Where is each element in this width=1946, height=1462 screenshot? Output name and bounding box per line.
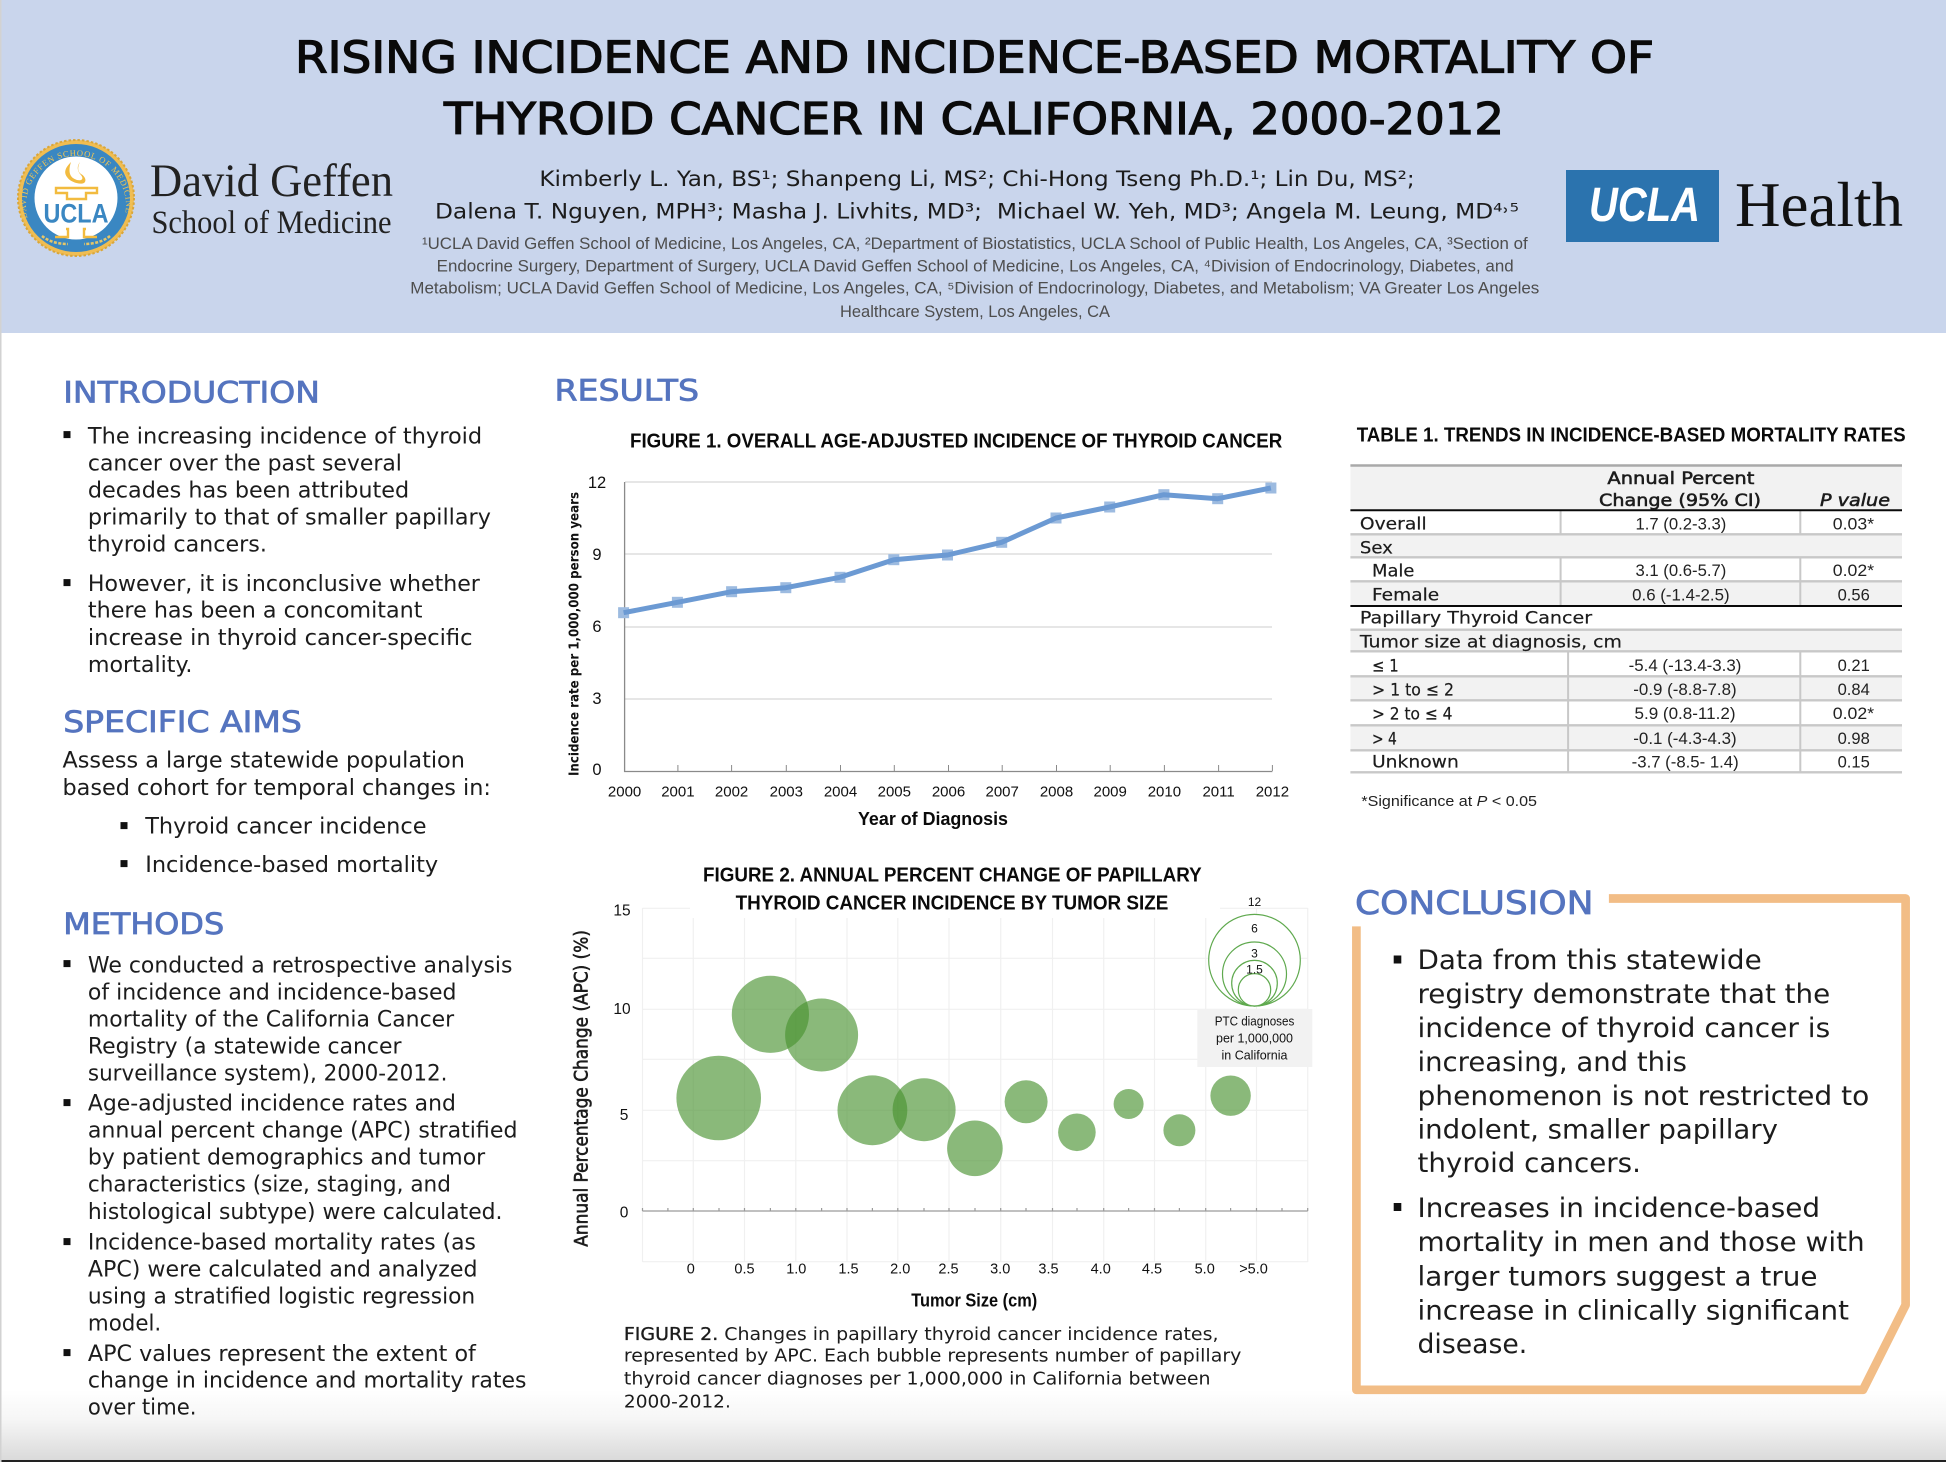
methods bullets: APC) were calculated and analyzed <box>88 1258 477 1283</box>
panel: specific aims <box>62 705 491 878</box>
figure 1 data markers <box>618 482 1276 618</box>
affiliations: Healthcare System, Los Angeles, CA <box>840 303 1110 321</box>
affiliations: ¹UCLA David Geffen School of Medicine, Los Angeles, CA, ²Department of Biostatistics, UCLA School of Public Health, Los Angeles, CA, ³Section of <box>422 235 1528 253</box>
figure 2 size legend: in California <box>1222 1047 1288 1062</box>
table row labels: Tumor size at diagnosis, cm <box>1359 632 1622 652</box>
figure 1 title: FIGURE 1. OVERALL AGE-ADJUSTED INCIDENCE OF THYROID CANCER <box>630 430 1283 452</box>
figure 1 y axis labels: 3 <box>592 690 602 708</box>
introduction bullets: increase in thyroid cancer-specific <box>88 626 472 651</box>
methods bullets: model. <box>88 1312 161 1337</box>
figure 2 size legend: per 1,000,000 <box>1216 1031 1293 1046</box>
table row labels: > 4 <box>1372 729 1397 749</box>
table row labels: > 2 to ≤ 4 <box>1372 704 1452 724</box>
table values: p value: 0.02* <box>1833 705 1875 723</box>
figure 2 y axis labels: 0 <box>620 1205 629 1222</box>
table values: p value: 0.56 <box>1838 586 1870 604</box>
figure 2 x axis labels: 0.5 <box>734 1262 755 1278</box>
panel: introduction <box>63 376 491 678</box>
figure 1 y axis labels <box>588 474 606 779</box>
table row labels: Female <box>1372 586 1439 606</box>
figure 1 x axis labels: 2002 <box>715 784 748 801</box>
heading: specific aims: SPECIFIC AIMS <box>63 705 302 739</box>
methods bullets: using a stratified logistic regression <box>88 1285 475 1310</box>
heading: introduction: INTRODUCTION <box>63 376 320 410</box>
logo: David Geffen School of Medicine wordmark <box>150 155 393 241</box>
introduction bullets: there has been a concomitant <box>88 599 423 624</box>
figure 2 size legend <box>1197 895 1312 1067</box>
figure 2 x axis title: Tumor Size (cm) <box>911 1290 1037 1310</box>
table header: Change (95% CI) <box>1599 491 1761 511</box>
conclusion bullets: Data from this statewide <box>1418 945 1762 976</box>
methods bullets: Registry (a statewide cancer <box>88 1035 402 1060</box>
figure 1 x axis labels: 2003 <box>770 784 803 801</box>
title: THYROID CANCER IN CALIFORNIA, 2000-2012 <box>443 95 1504 145</box>
figure 2 x axis labels <box>687 1262 1268 1278</box>
title <box>295 34 1654 145</box>
figure 2 caption <box>624 1324 1242 1412</box>
figure 1 x axis labels: 2008 <box>1040 784 1073 801</box>
figure 1 x axis labels: 2011 <box>1202 784 1235 801</box>
methods bullets: Incidence-based mortality rates (as <box>88 1230 476 1255</box>
table values: annual percent change: 5.9 (0.8-11.2) <box>1634 705 1736 723</box>
introduction bullets: mortality. <box>88 653 192 678</box>
methods bullets: We conducted a retrospective analysis <box>88 954 512 979</box>
table row shading <box>1350 466 1902 750</box>
figure 2 y axis labels: 15 <box>613 903 631 920</box>
authors: Dalena T. Nguyen, MPH³; Masha J. Livhits, MD³; Michael W. Yeh, MD³; Angela M. Leung, MD⁴˒⁵ <box>435 199 1519 223</box>
heading: results: RESULTS <box>554 374 699 408</box>
table header: P value <box>1820 491 1890 511</box>
methods bullets: over time. <box>88 1396 196 1421</box>
introduction bullets <box>64 425 491 678</box>
figure 2 title <box>703 865 1202 914</box>
table row labels: Male <box>1372 562 1414 582</box>
aims text: Assess a large statewide population <box>62 749 465 774</box>
figure 1 x axis labels: 2001 <box>661 784 695 801</box>
conclusion bullets: Increases in incidence-based <box>1418 1193 1820 1224</box>
figure 2 x axis labels: 1.5 <box>838 1262 859 1278</box>
figure 2 x axis labels: 2.0 <box>890 1262 910 1278</box>
introduction bullets: primarily to that of smaller papillary <box>88 506 491 531</box>
figure 1 x axis labels: 2005 <box>878 784 911 801</box>
table row labels <box>1359 514 1622 772</box>
methods bullets <box>64 954 527 1421</box>
figure 2 caption: FIGURE 2. Changes in papillary thyroid cancer incidence rates, <box>624 1324 1218 1345</box>
table values: annual percent change: 0.6 (-1.4-2.5) <box>1632 586 1730 604</box>
figure 2 caption: thyroid cancer diagnoses per 1,000,000 in California between <box>624 1369 1211 1390</box>
figure 1 y axis labels: 0 <box>592 761 602 779</box>
introduction bullets: cancer over the past several <box>88 451 402 476</box>
table title: TABLE 1. TRENDS IN INCIDENCE-BASED MORTALITY RATES <box>1357 425 1906 447</box>
figure 2 caption: 2000-2012. <box>624 1391 731 1412</box>
methods bullets: of incidence and incidence-based <box>88 980 456 1005</box>
figure 2 x axis labels: 0 <box>687 1262 695 1278</box>
figure 2 title backing <box>690 860 1220 918</box>
heading: conclusion: CONCLUSION <box>1355 884 1594 922</box>
header banner <box>2 0 1946 333</box>
table values: p value: 0.98 <box>1838 730 1870 748</box>
methods bullets: Age-adjusted incidence rates and <box>88 1092 456 1117</box>
logo: UCLA Health: UCLA <box>1589 179 1700 232</box>
methods bullets: mortality of the California Cancer <box>88 1008 455 1033</box>
figure 1 y axis labels: 9 <box>592 546 602 564</box>
table row labels: Unknown <box>1372 752 1459 772</box>
table values: p value: 0.84 <box>1838 681 1870 699</box>
figure 2 x axis labels: 1.0 <box>786 1262 806 1278</box>
conclusion bullets: indolent, smaller papillary <box>1418 1114 1778 1145</box>
introduction bullets: thyroid cancers. <box>88 533 267 558</box>
affiliations: Metabolism; UCLA David Geffen School of Medicine, Los Angeles, CA, ⁵Division of Endocrinology, Diabetes, and Metabolism; VA Greater Los Angeles <box>410 279 1539 297</box>
figure 1 x axis labels: 2000 <box>608 784 641 801</box>
figure 2 size legend: 3 <box>1251 946 1258 960</box>
table values: annual percent change: 3.1 (0.6-5.7) <box>1636 562 1726 580</box>
table values: p value: 0.15 <box>1838 754 1870 772</box>
table row labels: Sex <box>1360 539 1393 559</box>
figure 2 size legend: PTC diagnoses <box>1215 1014 1295 1029</box>
figure 1 y axis title: Incidence rate per 1,000,000 person years <box>566 492 582 776</box>
table footnote: *Significance at P < 0.05 <box>1361 793 1537 810</box>
logo: David Geffen School of Medicine wordmark: David Geffen <box>150 155 393 207</box>
figure 1 x axis labels: 2007 <box>986 784 1019 801</box>
figure 1 axes <box>625 482 1272 772</box>
aims text <box>62 749 491 878</box>
table values: annual percent change: 1.7 (0.2-3.3) <box>1636 516 1726 534</box>
figure 2 gridlines <box>642 908 1308 1262</box>
introduction bullets: The increasing incidence of thyroid <box>87 425 482 450</box>
figure 2 size legend: 1.5 <box>1246 962 1263 976</box>
table values: annual percent change: -5.4 (-13.4-3.3) <box>1629 657 1741 675</box>
figure 1 x axis labels: 2012 <box>1256 784 1289 801</box>
conclusion bullets: registry demonstrate that the <box>1418 979 1830 1010</box>
figure 2 caption: represented by APC. Each bubble represents number of papillary <box>624 1346 1242 1367</box>
title: RISING INCIDENCE AND INCIDENCE-BASED MORTALITY OF <box>295 34 1654 84</box>
logo: David Geffen School of Medicine wordmark: School of Medicine <box>152 205 392 241</box>
figure 2 x axis labels: 4.5 <box>1142 1262 1162 1278</box>
figure 1: line chart <box>566 430 1289 829</box>
figure 2 size legend: 12 <box>1248 895 1261 909</box>
affiliations <box>410 235 1539 321</box>
conclusion bullets: mortality in men and those with <box>1418 1227 1865 1258</box>
introduction bullets: decades has been attributed <box>88 478 409 503</box>
figure 2 x axis labels: 3.0 <box>990 1262 1010 1278</box>
figure 2 x axis labels: 4.0 <box>1091 1262 1111 1278</box>
authors: Kimberly L. Yan, BS¹; Shanpeng Li, MS²; Chi-Hong Tseng Ph.D.¹; Lin Du, MS²; <box>539 167 1415 191</box>
aims text: Thyroid cancer incidence <box>144 815 427 840</box>
table values: annual percent change: -0.1 (-4.3-4.3) <box>1633 730 1737 748</box>
figure 1 x axis labels: 2004 <box>824 784 857 801</box>
table values: p value <box>1833 516 1875 772</box>
figure 1 x axis title: Year of Diagnosis <box>858 808 1008 829</box>
conclusion bullets: incidence of thyroid cancer is <box>1418 1013 1830 1044</box>
table rules <box>1350 466 1902 772</box>
figure 2 y axis labels: 10 <box>613 1001 631 1018</box>
figure 2: bubble chart <box>572 860 1312 1310</box>
table values: p value: 0.21 <box>1838 657 1870 675</box>
figure 2 title: THYROID CANCER INCIDENCE BY TUMOR SIZE <box>736 892 1168 914</box>
table values: p value: 0.03* <box>1833 516 1875 534</box>
conclusion bullets: increasing, and this <box>1418 1047 1687 1078</box>
methods bullets: characteristics (size, staging, and <box>88 1173 451 1198</box>
figure 2 size legend: 6 <box>1251 921 1258 935</box>
table 1 <box>1350 425 1906 810</box>
heading: methods: METHODS <box>63 907 224 941</box>
table row labels: > 1 to ≤ 2 <box>1372 680 1454 700</box>
conclusion frame <box>1356 898 1906 1390</box>
figure 2 bubbles <box>676 976 1251 1176</box>
logo: David Geffen School of Medicine seal <box>17 139 135 257</box>
methods bullets: APC values represent the extent of <box>88 1342 477 1367</box>
logo: David Geffen School of Medicine seal: UCLA <box>44 198 108 228</box>
table values: annual percent change <box>1629 516 1741 772</box>
figure 2 y axis title: Annual Percentage Change (APC) (%) <box>572 930 592 1247</box>
methods bullets: histological subtype) were calculated. <box>88 1200 502 1225</box>
figure 1 x axis labels: 2006 <box>932 784 965 801</box>
affiliations: Endocrine Surgery, Department of Surgery, UCLA David Geffen School of Medicine, Los Angeles, CA, ⁴Division of Endocrinology, Diabetes, and <box>437 257 1514 275</box>
figure 1 x axis labels: 2010 <box>1148 784 1181 801</box>
conclusion bullets: disease. <box>1418 1329 1527 1360</box>
authors <box>435 167 1519 223</box>
table values: annual percent change: -3.7 (-8.5- 1.4) <box>1632 754 1739 772</box>
figure 1 data line <box>624 488 1271 613</box>
panel: methods <box>63 907 526 1421</box>
figure 2 x axis labels: 2.5 <box>938 1262 959 1278</box>
figure 2 title: FIGURE 2. ANNUAL PERCENT CHANGE OF PAPILLARY <box>703 865 1202 887</box>
figure 1 y axis labels: 12 <box>588 474 606 492</box>
conclusion bullets: larger tumors suggest a true <box>1418 1261 1818 1292</box>
table values: annual percent change: -0.9 (-8.8-7.8) <box>1633 681 1737 699</box>
conclusion bullets: increase in clinically significant <box>1418 1296 1849 1326</box>
table header: Annual Percent <box>1607 469 1755 489</box>
table row labels: ≤ 1 <box>1372 657 1399 677</box>
figure 2 y axis labels: 5 <box>620 1107 628 1124</box>
methods bullets: annual percent change (APC) stratified <box>88 1118 517 1143</box>
logo: UCLA Health: Health <box>1735 170 1903 240</box>
introduction bullets: However, it is inconclusive whether <box>88 572 481 597</box>
aims text: based cohort for temporal changes in: <box>62 776 491 801</box>
methods bullets: surveillance system), 2000-2012. <box>88 1062 447 1087</box>
figure 2 x axis labels: >5.0 <box>1239 1262 1268 1278</box>
figure 1 y axis labels: 6 <box>592 618 602 636</box>
figure 2 zero axis <box>642 1208 1308 1211</box>
figure 1 x axis labels <box>608 784 1289 801</box>
table values: p value: 0.02* <box>1833 562 1875 580</box>
logo: David Geffen School of Medicine seal: DAVID GEFFEN SCHOOL OF MEDICINE <box>21 150 132 219</box>
table row labels: Papillary Thyroid Cancer <box>1360 608 1592 628</box>
figure 1 x axis labels: 2009 <box>1094 784 1127 801</box>
conclusion bullets: thyroid cancers. <box>1418 1148 1641 1179</box>
figure 2 x axis labels: 3.5 <box>1038 1262 1059 1278</box>
conclusion bullets: phenomenon is not restricted to <box>1418 1081 1869 1112</box>
methods bullets: by patient demographics and tumor <box>88 1146 486 1171</box>
panel: conclusion <box>1355 884 1906 1390</box>
logo: UCLA Health <box>1566 170 1903 242</box>
aims text: Incidence-based mortality <box>145 853 438 878</box>
table header <box>1599 469 1890 511</box>
figure 2 y axis labels <box>613 903 631 1222</box>
conclusion bullets <box>1394 945 1869 1360</box>
table row labels: Overall <box>1360 514 1427 534</box>
figure 2 x axis labels: 5.0 <box>1195 1262 1215 1278</box>
methods bullets: change in incidence and mortality rates <box>88 1369 526 1394</box>
